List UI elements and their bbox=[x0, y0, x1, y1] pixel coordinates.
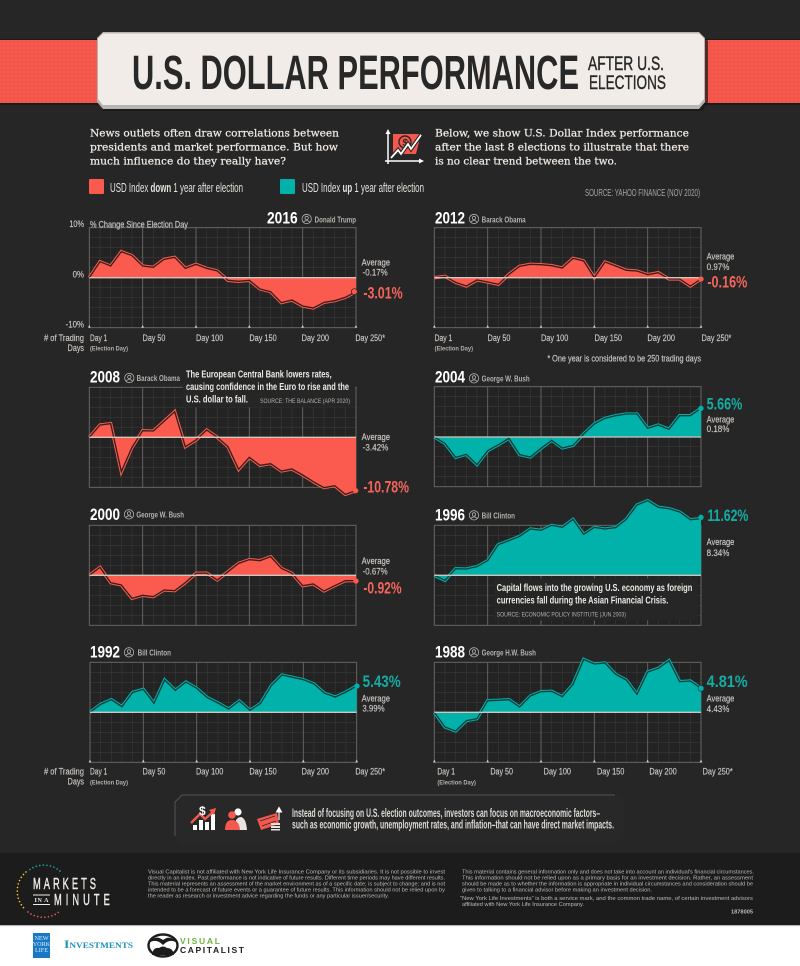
disclaimer right bbox=[460, 870, 754, 916]
annotation: Asian Financial Crisis: SOURCE: ECONOMIC POLICY INSTITUTE (JUN 2003) bbox=[497, 611, 626, 618]
intro text right bbox=[435, 128, 689, 168]
logo: Markets in a Minute: IN A bbox=[34, 898, 49, 904]
intro text right: after the last 8 elections to illustrate that there bbox=[435, 142, 689, 154]
intro text left bbox=[90, 128, 339, 168]
panel: 2012: 0.97% bbox=[707, 262, 729, 272]
logo: New York Life Investments: YORK bbox=[33, 941, 51, 948]
panel: 1988: Day 100 bbox=[544, 767, 571, 777]
panel: 1992: # of Trading bbox=[44, 767, 84, 777]
panel: 2016: Day 150 bbox=[249, 333, 277, 343]
panel: 2004: George W. Bush bbox=[482, 374, 530, 384]
panel: 2004: 0.18% bbox=[707, 424, 729, 434]
disclaimer right: should be made as to whether the information is appropriate in individual circumstances and consideration should be bbox=[462, 882, 753, 888]
callout: macroeconomic factors bbox=[175, 795, 624, 843]
disclaimer left: directly in an index. Past performance is not indicative of future results. Different time periods may have different results. bbox=[148, 876, 445, 882]
panel: 2000: Average bbox=[362, 556, 390, 566]
panel: 2000: -0.92% bbox=[363, 579, 402, 597]
icon: money chart bbox=[385, 129, 424, 164]
panel: 1992: 1992 bbox=[90, 642, 120, 661]
annotation: European Central Bank: The European Central Bank lowers rates, bbox=[186, 369, 332, 380]
disclaimer right: “New York Life Investments” is both a service mark, and the common trade name, of certain investment advisors bbox=[460, 896, 753, 902]
panel: 2000 bbox=[89, 505, 402, 625]
subtitle bbox=[588, 53, 666, 94]
icon: people bbox=[225, 808, 247, 830]
logo: Visual Capitalist: CAPITALIST bbox=[180, 945, 245, 955]
panel: 1996: Bill Clinton bbox=[482, 511, 515, 521]
panel: 2000: -0.67% bbox=[363, 566, 388, 576]
disclaimer left: the reader as research or investment advice regarding the funds or any particular issuer/security. bbox=[148, 894, 389, 900]
panel: 2016: (Election Day) bbox=[90, 346, 128, 353]
title banner bbox=[0, 32, 800, 111]
panel: 1992: Bill Clinton bbox=[138, 648, 171, 658]
intro text right: is no clear trend between the two. bbox=[435, 156, 617, 168]
panel: 1988: 1988 bbox=[435, 642, 465, 661]
panel: 2012: * One year is considered to be 250 trading days bbox=[547, 354, 701, 364]
intro text right: Below, we show U.S. Dollar Index performance bbox=[435, 128, 689, 140]
logo: New York Life Investments: Investments bbox=[64, 937, 134, 951]
disclaimer left bbox=[148, 870, 445, 900]
intro text left: presidents and market performance. But how bbox=[90, 142, 338, 154]
panel: 1992 bbox=[44, 642, 401, 787]
panel: 2004: Average bbox=[707, 414, 734, 424]
callout text bbox=[292, 807, 614, 832]
panel: 1992: Day 200 bbox=[302, 767, 329, 777]
panel: 2008: -10.78% bbox=[363, 479, 409, 497]
panel: 2016: Day 200 bbox=[302, 333, 329, 343]
panel: 1988: Day 250* bbox=[703, 767, 733, 777]
legend: index up bbox=[280, 179, 424, 195]
annotation: Asian Financial Crisis: Capital flows into the growing U.S. economy as foreign bbox=[497, 583, 692, 594]
panel: 1992: Days bbox=[68, 777, 84, 787]
panel: 2016: Day 100 bbox=[196, 333, 223, 343]
logo: Markets in a Minute: MARKETS bbox=[33, 874, 96, 893]
annotation: European Central Bank: SOURCE: THE BALANCE (APR 2020) bbox=[260, 398, 350, 405]
annotation: European Central Bank: causing confidence in the Euro to rise and the bbox=[186, 382, 349, 393]
disclaimer right: given to talking to a financial advisor before making an investment decision. bbox=[462, 888, 652, 894]
panel: 2012: Average bbox=[707, 252, 734, 262]
disclaimer left: This material represents an assessment of the market environment as of a specific date; is subject to change; and is not bbox=[148, 882, 445, 888]
panel: 2016: 10% bbox=[69, 219, 84, 229]
intro text left: much influence do they really have? bbox=[90, 156, 286, 168]
logo: Visual Capitalist bbox=[148, 934, 245, 956]
legend: index down bbox=[89, 179, 243, 195]
panel: 1988: 4.81% bbox=[707, 673, 748, 691]
panel: 1996 bbox=[434, 501, 749, 625]
panel: 2000: George W. Bush bbox=[136, 510, 184, 520]
panel: 2016: 2016 bbox=[267, 208, 298, 227]
panel: 2008: -3.42% bbox=[363, 443, 388, 453]
logo: Visual Capitalist: VISUAL bbox=[180, 936, 220, 946]
panel: 2016 bbox=[44, 208, 403, 353]
icon: rising chart with dollar bbox=[191, 804, 216, 830]
panel: 2008: 2008 bbox=[90, 368, 120, 387]
disclaimer right: This information should not be relied upon as a primary basis for an investment decision. Rather, an assessment bbox=[462, 876, 753, 882]
panel: 2008: Barack Obama bbox=[137, 373, 180, 383]
annotation: European Central Bank bbox=[186, 369, 350, 406]
logo: New York Life Investments bbox=[33, 933, 134, 958]
panel: 2016: # of Trading bbox=[44, 333, 84, 343]
panel: 1992: Day 1 bbox=[90, 767, 107, 777]
panel: 1996: 11.62% bbox=[707, 507, 749, 525]
panel: 1988: (Election Day) bbox=[437, 780, 476, 787]
panel: 2012: Day 1 bbox=[435, 333, 452, 343]
panel: 1988: Day 50 bbox=[490, 767, 513, 777]
logo: New York Life Investments: LIFE bbox=[35, 947, 48, 954]
panel: 1988: Day 150 bbox=[597, 767, 624, 777]
panel: 2016: % Change Since Election Day bbox=[90, 219, 188, 229]
disclaimer left: intended to be a forecast of future events or a guarantee of future results. This information should not be relied upon by bbox=[148, 888, 445, 894]
panel: 1996: 1996 bbox=[435, 505, 465, 524]
panel: 2004 bbox=[434, 368, 743, 487]
panel: 1992: Day 50 bbox=[143, 767, 165, 777]
subtitle: ELECTIONS bbox=[589, 72, 666, 94]
footer band bbox=[0, 853, 800, 925]
panel: 2004: 5.66% bbox=[707, 395, 743, 413]
panel: 2012 bbox=[433, 208, 748, 364]
logo: Markets in a Minute bbox=[17, 865, 110, 917]
panel: 1992: Day 250* bbox=[355, 767, 385, 777]
panel: 1988: 4.43% bbox=[707, 704, 729, 714]
panel: 2012: Day 100 bbox=[541, 333, 568, 343]
disclaimer right: This material contains general information only and does not take into account an individual's financial circumstances. bbox=[462, 870, 754, 876]
logo: New York Life Investments: NEW bbox=[34, 935, 49, 942]
annotation: Asian Financial Crisis: currencies fall during the Asian Financial Crisis. bbox=[497, 596, 668, 607]
disclaimer right: affiliated with New York Life Insurance Company. bbox=[462, 902, 584, 908]
panel: 1988: Day 200 bbox=[649, 767, 677, 777]
icon: money stack bbox=[257, 808, 282, 830]
panel: 2004: 2004 bbox=[435, 368, 466, 387]
panel: 2016: Day 1 bbox=[90, 333, 107, 343]
panel: 2016: -3.01% bbox=[363, 284, 403, 302]
legend: index up: USD Index up 1 year after election bbox=[302, 180, 424, 195]
disclaimer right: 1878005 bbox=[731, 910, 753, 916]
panel: 2012: Day 50 bbox=[488, 333, 510, 343]
white logo strip bbox=[0, 925, 800, 966]
panel: 2016: Average bbox=[362, 258, 390, 268]
panel: 1996: 8.34% bbox=[707, 548, 729, 558]
logo: Markets in a Minute: MINUTE bbox=[54, 890, 110, 909]
panel: 2000: 2000 bbox=[90, 505, 120, 524]
icon: rising chart with dollar: $ bbox=[199, 804, 206, 818]
panel: 2012: Barack Obama bbox=[482, 214, 526, 224]
panel: 2016: 0% bbox=[73, 269, 84, 279]
panel: 2008 bbox=[89, 368, 409, 497]
panel: 1988: Average bbox=[707, 694, 734, 704]
disclaimer left: Visual Capitalist is not affiliated with New York Life Insurance Company or its subsidiaries. It is not possible to invest bbox=[148, 870, 445, 876]
panel: 2012: (Election Day) bbox=[435, 346, 473, 353]
panel: 1992: Day 100 bbox=[196, 767, 223, 777]
panel: 1992: (Election Day) bbox=[90, 780, 128, 787]
panel: 1992: 3.99% bbox=[362, 703, 385, 713]
panel: 1988 bbox=[433, 642, 748, 787]
panel: 2012: 2012 bbox=[435, 208, 465, 227]
panel: 1996: Average bbox=[707, 537, 734, 547]
panel: 1992: 5.43% bbox=[363, 673, 401, 691]
panel: 2016: Donald Trump bbox=[315, 214, 356, 224]
panel: 2016: -10% bbox=[66, 319, 84, 329]
panel: 1988: Day 1 bbox=[437, 767, 455, 777]
panel: 1988: George H.W. Bush bbox=[482, 648, 536, 658]
panel: 1992: Day 150 bbox=[249, 767, 277, 777]
panel: 2012: Day 250* bbox=[702, 333, 732, 343]
panel: 2016: -0.17% bbox=[363, 268, 388, 278]
source: SOURCE: YAHOO FINANCE (NOV 2020) bbox=[585, 187, 700, 199]
panel: 2016: Days bbox=[68, 343, 84, 353]
annotation: Asian Financial Crisis bbox=[497, 583, 692, 618]
panel: 2016: Day 50 bbox=[143, 333, 165, 343]
panel: 2016: Day 250* bbox=[355, 333, 385, 343]
annotation: European Central Bank: U.S. dollar to fall. bbox=[186, 395, 248, 406]
panel: 2012: Day 150 bbox=[595, 333, 622, 343]
panel: 2008: Average bbox=[362, 432, 390, 442]
legend: index down: USD Index down 1 year after election bbox=[110, 180, 243, 195]
subtitle: AFTER U.S. bbox=[588, 53, 664, 75]
panel: 2012: Day 200 bbox=[647, 333, 675, 343]
intro text left: News outlets often draw correlations between bbox=[90, 128, 339, 140]
icon: money chart: $ bbox=[402, 138, 408, 149]
panel: 2012: -0.16% bbox=[707, 274, 748, 292]
panel: 1992: Average bbox=[362, 693, 390, 703]
